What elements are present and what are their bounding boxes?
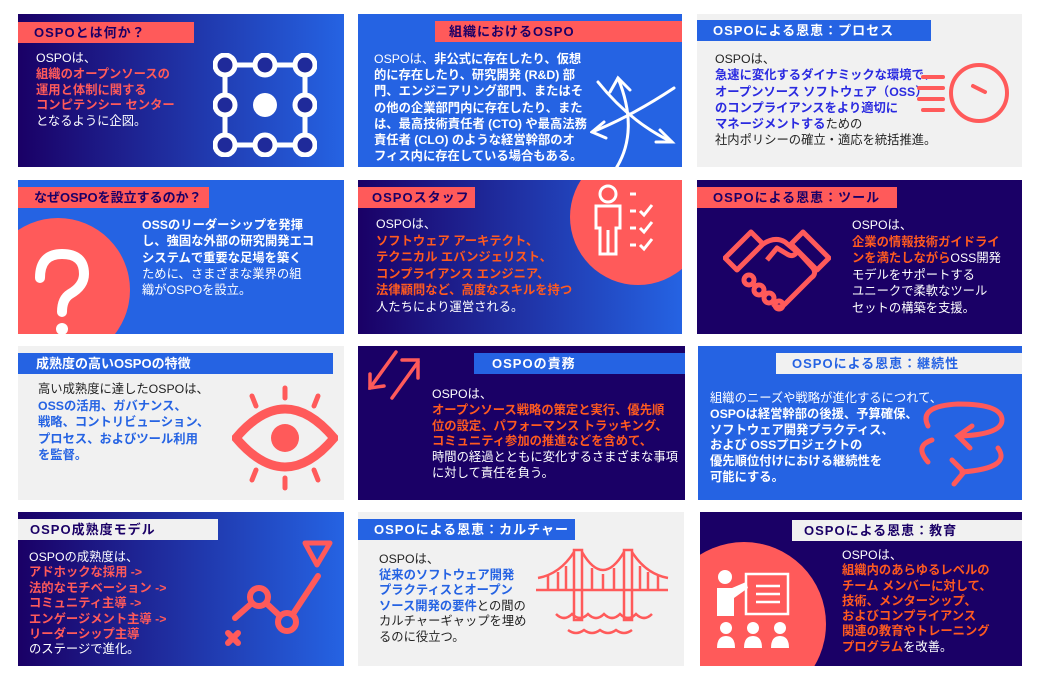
text block: の他の企業部門内に存在したり、また [374,101,583,115]
text block: テクニカル エバンジェリスト、 [376,250,552,264]
text block [374,52,587,163]
icon: teacher circle [700,542,826,666]
text block: OSPOの成熟度は、 [29,550,138,564]
text block: に対して責任を負う。 [432,466,554,480]
text block: システムで重要な足場を築く [142,251,302,265]
panel: benefit culture [358,512,684,666]
text block: ソース開発の要件との間の [379,599,526,613]
text block [38,382,209,462]
icon: clock speed [917,63,1009,123]
text block: プロセス、およびツール利用 [38,432,198,446]
heading: OSPOスタッフ [372,190,470,205]
text block: OSPOは、非公式に存在したり、仮想 [374,52,581,66]
heading: なぜOSPOを設立するのか？ [34,190,202,205]
panel: OSPO responsibilities [358,346,685,500]
text block: オープンソース ソフトウェア（OSS） [715,85,928,99]
panel: OSPO staff [358,180,682,334]
panel: benefit tools [697,180,1022,334]
text block: エンゲージメント主導 -> [29,612,166,626]
text block: チーム メンバーに対して、 [842,579,992,593]
text block: 責任者 (CLO) のような経営幹部のオ [374,133,575,147]
text block: OSPOは、 [379,552,439,566]
heading: OSPOによる恩恵：ツール [713,190,880,205]
panel: benefit continuity [698,346,1022,500]
text block: 可能にする。 [710,470,784,484]
text block: 運用と体制に関する [36,83,147,97]
heading [792,520,1022,541]
text block: 人たちにより運営される。 [376,300,523,314]
text block: 社内ポリシーの確立・適応を統括推進。 [715,133,936,147]
text block: のステージで進化。 [29,642,139,656]
panel: high maturity OSPO [18,346,344,500]
icon: question circle [18,218,130,334]
heading [776,353,1022,374]
text block: OSPOは、 [432,387,492,401]
text block: ンを満たしながらOSS開発 [852,251,1001,265]
text block: コンピテンシー センター [36,98,175,112]
text block [29,550,166,656]
heading [697,187,897,208]
text block [376,217,572,314]
text block: のコンプライアンスをより適切に [715,101,898,115]
text block: 的に存在したり、研究開発 (R&D) 部 [374,68,575,82]
text block: OSPOは、 [852,218,912,232]
heading [18,353,333,374]
text block: 優先順位付けにおける継続性を [710,454,882,468]
icon: node grid [213,53,317,157]
text block [36,51,175,128]
heading [18,519,218,540]
text block: となるように企図。 [36,114,146,128]
text block: ソフトウェア アーキテクト、 [376,234,538,248]
text block: ソフトウェア開発プラクティス、 [710,423,894,437]
heading [697,20,931,41]
text block: 従来のソフトウェア開発 [379,568,514,582]
icon: eye [232,386,338,490]
text block: 織がOSPOを設立。 [142,283,251,297]
text block: コンプライアンス エンジニア、 [376,267,549,281]
text block: 組織のオープンソースの [36,67,170,81]
text block: ために、さまざまな業界の組 [142,267,302,281]
text block: カルチャーギャップを埋め [379,614,526,628]
text block: 法律顧問など、高度なスキルを持つ [376,283,572,297]
heading: 組織におけるOSPO [449,24,575,39]
icon: crossing arrows [590,76,676,167]
heading [18,187,209,208]
text block: OSSのリーダーシップを発揮 [142,218,303,232]
text block: 法的なモチベーション -> [29,581,166,595]
text block: プログラムを改善。 [842,640,952,654]
text block: オープンソース戦略の策定と実行、優先順 [432,403,664,417]
text block: を監督。 [38,448,87,462]
text block: アドホックな採用 -> [29,565,142,579]
text block: 組織内のあらゆるレベルの [842,563,990,577]
text block [379,552,526,644]
text block: OSPOは経営幹部の後援、予算確保、 [710,407,918,421]
heading [358,187,475,208]
text block: および OSSプロジェクトの [710,438,862,452]
text block: モデルをサポートする [852,268,975,282]
heading: OSPOによる恩恵：プロセス [713,23,894,38]
text block: OSPOは、 [36,51,96,65]
text block: プラクティスとオープン [379,583,513,597]
panel: what is OSPO [18,14,344,167]
text block: OSSの活用、ガバナンス、 [38,399,187,413]
text block: OSPOは、 [376,217,436,231]
icon: person checklist circle [570,180,682,285]
text block: は、最高技術責任者 (CTO) や最高法務 [374,117,587,131]
icon: cycle arrows [919,402,1004,486]
panel: maturity model [18,512,344,666]
text block: マネージメントするための [715,117,862,131]
text block: リーダーシップ主導 [29,627,139,641]
text block: るのに役立つ。 [379,630,465,644]
text block: 門、エンジニアリング部門、またはそ [374,84,583,98]
heading [18,22,194,43]
icon: diagonal arrows [368,350,420,400]
heading [358,519,575,540]
text block: 戦略、コントリビューション、 [38,415,209,429]
icon: bridge [536,548,668,634]
heading: 成熟度の高いOSPOの特徴 [36,356,191,371]
panel: why establish OSPO [18,180,344,334]
panel: benefit process [697,14,1022,167]
heading: OSPOによる恩恵：継続性 [792,356,959,371]
panel: benefit education [700,512,1022,666]
text block: 組織のニーズや戦略が進化するにつれて、 [710,391,942,405]
text block: 技術、メンターシップ、 [842,594,977,608]
text block [142,218,314,297]
icon: growth chart [225,540,332,646]
heading: OSPO成熟度モデル [30,522,156,537]
text block: OSPOは、 [715,52,775,66]
text block [432,387,678,480]
text block: 急速に変化するダイナミックな環境で、 [715,68,936,82]
text block: 高い成熟度に達したOSPOは、 [38,382,209,396]
heading [474,353,685,374]
text block: およびコンプライアンス [842,609,976,623]
heading: OSPOとは何か？ [34,25,146,40]
text block: 時間の経過とともに変化するさまざまな事項 [432,450,678,464]
text block: 関連の教育やトレーニング [842,624,990,638]
icon: handshake [723,230,831,312]
text block: 企業の情報技術ガイドライ [852,234,1000,248]
heading: OSPOによる恩恵：教育 [804,523,957,538]
text block: フィス内に存在している場合もある。 [374,149,582,163]
text block [842,548,992,654]
text block: セットの構築を支援。 [852,300,975,314]
heading [435,21,682,42]
heading: OSPOの責務 [492,356,576,371]
heading: OSPOによる恩恵：カルチャー [374,522,569,537]
text block [852,218,1001,314]
text block: コミュニティ主導 -> [29,596,141,610]
text block [715,52,936,147]
text block: し、強固な外部の研究開発エコ [142,234,314,248]
text block: ユニークで柔軟なツール [852,284,987,298]
panel: OSPO in organization [358,14,682,167]
text block [710,391,942,484]
text block: OSPOは、 [842,548,902,562]
text block: 位の設定、パフォーマンス トラッキング、 [432,419,668,433]
text block: コミュニティ参加の推進などを含めて、 [432,434,652,448]
